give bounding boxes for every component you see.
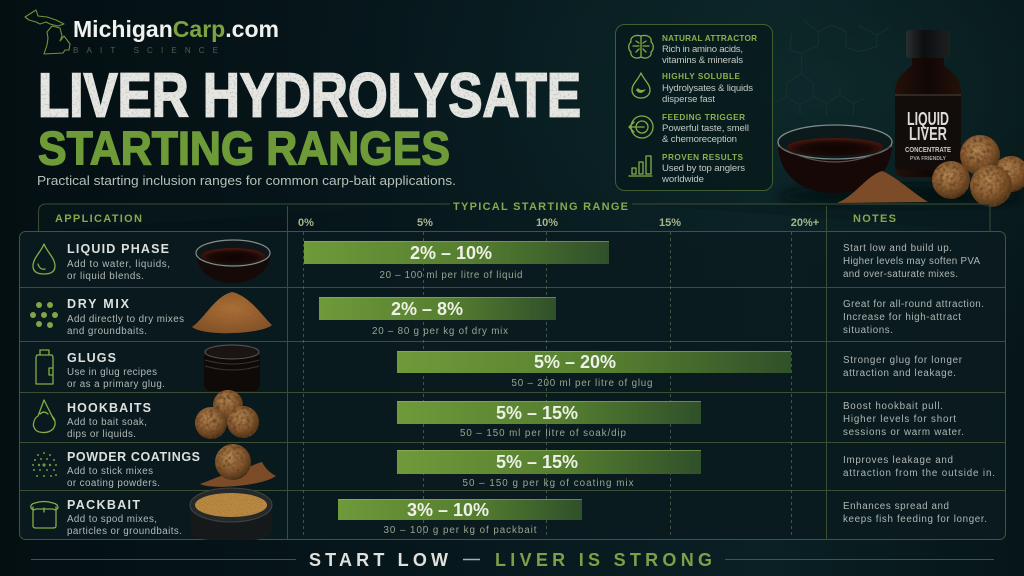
axis labels: 20%+ xyxy=(791,217,819,229)
icon: drop xyxy=(33,244,55,274)
boilies xyxy=(932,135,1024,207)
row: dry mix: 20 – 80 g per kg of dry mix xyxy=(372,326,508,337)
image: tub xyxy=(190,488,272,540)
row: hookbaits: 50 – 150 ml per litre of soak/dip xyxy=(460,428,627,439)
footer slogan: LIVER IS STRONG xyxy=(495,550,712,570)
table header frame xyxy=(38,204,990,231)
row: hookbaits: Add to bait soak, xyxy=(67,417,147,428)
title xyxy=(38,62,581,174)
bottle: PVA FRIENDLY xyxy=(910,156,947,162)
benefit: highly soluble: disperse fast xyxy=(662,94,715,105)
row: liquid phase: Add to water, liquids, xyxy=(67,259,170,270)
benefit: natural attractor: NATURAL ATTRACTOR xyxy=(662,34,757,43)
row: packbait: Add to spod mixes, xyxy=(67,514,157,525)
product photo: bottle, bowl, powder and boilies xyxy=(778,30,1024,208)
row: powder coatings: POWDER COATINGS xyxy=(67,450,200,464)
row: glugs: attraction and leakage. xyxy=(843,368,956,379)
row: dry mix: and groundbaits. xyxy=(67,326,147,337)
row: hookbaits: Higher levels for short xyxy=(843,414,956,425)
row: liquid phase: 20 – 100 ml per litre of liquid xyxy=(380,270,522,281)
icon: bucket xyxy=(31,502,58,528)
title line 1: LIVER HYDROLYSATE xyxy=(38,62,581,130)
benefit: highly soluble: HIGHLY SOLUBLE xyxy=(662,72,741,81)
row: dry mix: Add directly to dry mixes xyxy=(67,314,184,325)
benefit: highly soluble xyxy=(632,72,753,105)
benefit: natural attractor xyxy=(629,34,757,66)
axis labels: 5% xyxy=(417,217,433,229)
row: glugs xyxy=(36,345,963,391)
row: packbait: Enhances spread and xyxy=(843,501,949,512)
image: jar xyxy=(204,345,260,391)
row: liquid phase: and over-saturate mixes. xyxy=(843,269,958,280)
range bar xyxy=(397,401,701,424)
row: packbait: particles or groundbaits. xyxy=(67,526,182,537)
row: glugs: 5% – 20% xyxy=(534,352,616,372)
row: packbait: 30 – 100 g per kg of packbait xyxy=(384,525,537,536)
axis labels: 10% xyxy=(536,217,558,229)
row: hookbaits: HOOKBAITS xyxy=(67,401,151,415)
powder pile xyxy=(837,171,928,203)
footer slogan: START LOW xyxy=(309,550,448,570)
row: liquid phase xyxy=(33,240,980,283)
range bar xyxy=(304,241,609,264)
molecule background diagram xyxy=(775,20,888,117)
subtitle: Practical starting inclusion ranges for common carp-bait applications. xyxy=(37,173,456,188)
footer slogan xyxy=(31,550,994,570)
logo xyxy=(25,10,279,55)
icon: dots xyxy=(30,302,58,328)
column heading: typical starting range: TYPICAL STARTING RANGE xyxy=(453,201,628,213)
row: powder coatings: 50 – 150 g per kg of coating mix xyxy=(462,478,634,489)
benefit: feeding trigger xyxy=(629,113,749,145)
benefit: proven results: Used by top anglers xyxy=(662,163,745,174)
row: powder coatings: 5% – 15% xyxy=(496,452,578,472)
range bar xyxy=(319,297,556,320)
row: hookbaits: sessions or warm water. xyxy=(843,427,964,438)
glass bowl xyxy=(778,125,892,193)
row: packbait: keeps fish feeding for longer. xyxy=(843,514,987,525)
row: packbait xyxy=(31,488,987,540)
row: dry mix: situations. xyxy=(843,325,893,336)
title line 2: STARTING RANGES xyxy=(38,121,450,174)
image: small bowl xyxy=(196,240,271,283)
benefit: feeding trigger: FEEDING TRIGGER xyxy=(662,113,745,122)
row: dry mix: 2% – 8% xyxy=(391,299,463,319)
panel: key benefits xyxy=(616,24,772,190)
row: powder coatings: attraction from the outside in. xyxy=(843,468,995,479)
axis labels: 0% xyxy=(298,217,314,229)
row: dry mix: Increase for high-attract xyxy=(843,312,961,323)
row: liquid phase: LIQUID PHASE xyxy=(67,242,169,256)
row: powder coatings xyxy=(32,444,995,489)
wordmark: MichiganCarp.com xyxy=(73,16,279,42)
image: coated boilie xyxy=(200,444,276,487)
range bar xyxy=(397,450,701,474)
row: liquid phase: Start low and build up. xyxy=(843,243,952,254)
row: hookbaits xyxy=(33,390,964,440)
row: glugs: Stronger glug for longer xyxy=(843,355,963,366)
row: hookbaits: Boost hookbait pull. xyxy=(843,401,943,412)
row: powder coatings: or coating powders. xyxy=(67,478,160,489)
icon: pear drop xyxy=(33,400,55,433)
row: powder coatings: Add to stick mixes xyxy=(67,466,153,477)
benefit: proven results xyxy=(629,153,745,185)
icon: bottle xyxy=(36,350,53,384)
benefit: proven results: worldwide xyxy=(661,174,704,185)
row: hookbaits: dips or liquids. xyxy=(67,429,136,440)
benefit: proven results: PROVEN RESULTS xyxy=(662,153,744,162)
bottle: LIQUID xyxy=(907,109,949,129)
row: hookbaits: 5% – 15% xyxy=(496,403,578,423)
bottle xyxy=(895,30,961,177)
range bar xyxy=(338,499,582,520)
bottle: LIVER xyxy=(909,124,947,144)
benefit: natural attractor: Rich in amino acids, xyxy=(662,44,743,55)
row: packbait: PACKBAIT xyxy=(67,498,140,512)
column heading: notes: NOTES xyxy=(853,213,896,225)
row: dry mix: DRY MIX xyxy=(67,297,130,311)
row: liquid phase: 2% – 10% xyxy=(410,243,492,263)
range table xyxy=(20,201,1006,540)
row: dry mix xyxy=(30,292,984,337)
tagline: BAIT SCIENCE xyxy=(73,46,218,55)
row: packbait: 3% – 10% xyxy=(407,500,489,520)
icon: Michigan outline xyxy=(25,10,70,54)
column heading: application: APPLICATION xyxy=(55,213,142,225)
row: liquid phase: or liquid blends. xyxy=(67,271,144,282)
row: dry mix: Great for all-round attraction. xyxy=(843,299,984,310)
row: glugs: Use in glug recipes xyxy=(67,367,157,378)
row: powder coatings: Improves leakage and xyxy=(843,455,953,466)
image: powder pile xyxy=(192,292,272,333)
row: glugs: 50 – 200 ml per litre of glug xyxy=(512,378,652,389)
row: liquid phase: Higher levels may soften PVA xyxy=(843,256,980,267)
axis labels xyxy=(298,217,819,229)
benefit: feeding trigger: & chemoreception xyxy=(662,134,737,145)
table body xyxy=(20,232,1006,540)
range bar xyxy=(397,351,791,373)
benefit: feeding trigger: Powerful taste, smell xyxy=(662,123,749,134)
row: glugs: or as a primary glug. xyxy=(67,379,165,390)
icon: speckled powder xyxy=(32,452,57,477)
axis labels: 15% xyxy=(659,217,681,229)
bottle: CONCENTRATE xyxy=(905,145,951,154)
benefit: highly soluble: Hydrolysates & liquids xyxy=(662,83,753,94)
benefit: natural attractor: vitamins & minerals xyxy=(662,55,743,66)
row: glugs: GLUGS xyxy=(67,351,116,365)
image: boilies xyxy=(195,390,259,439)
